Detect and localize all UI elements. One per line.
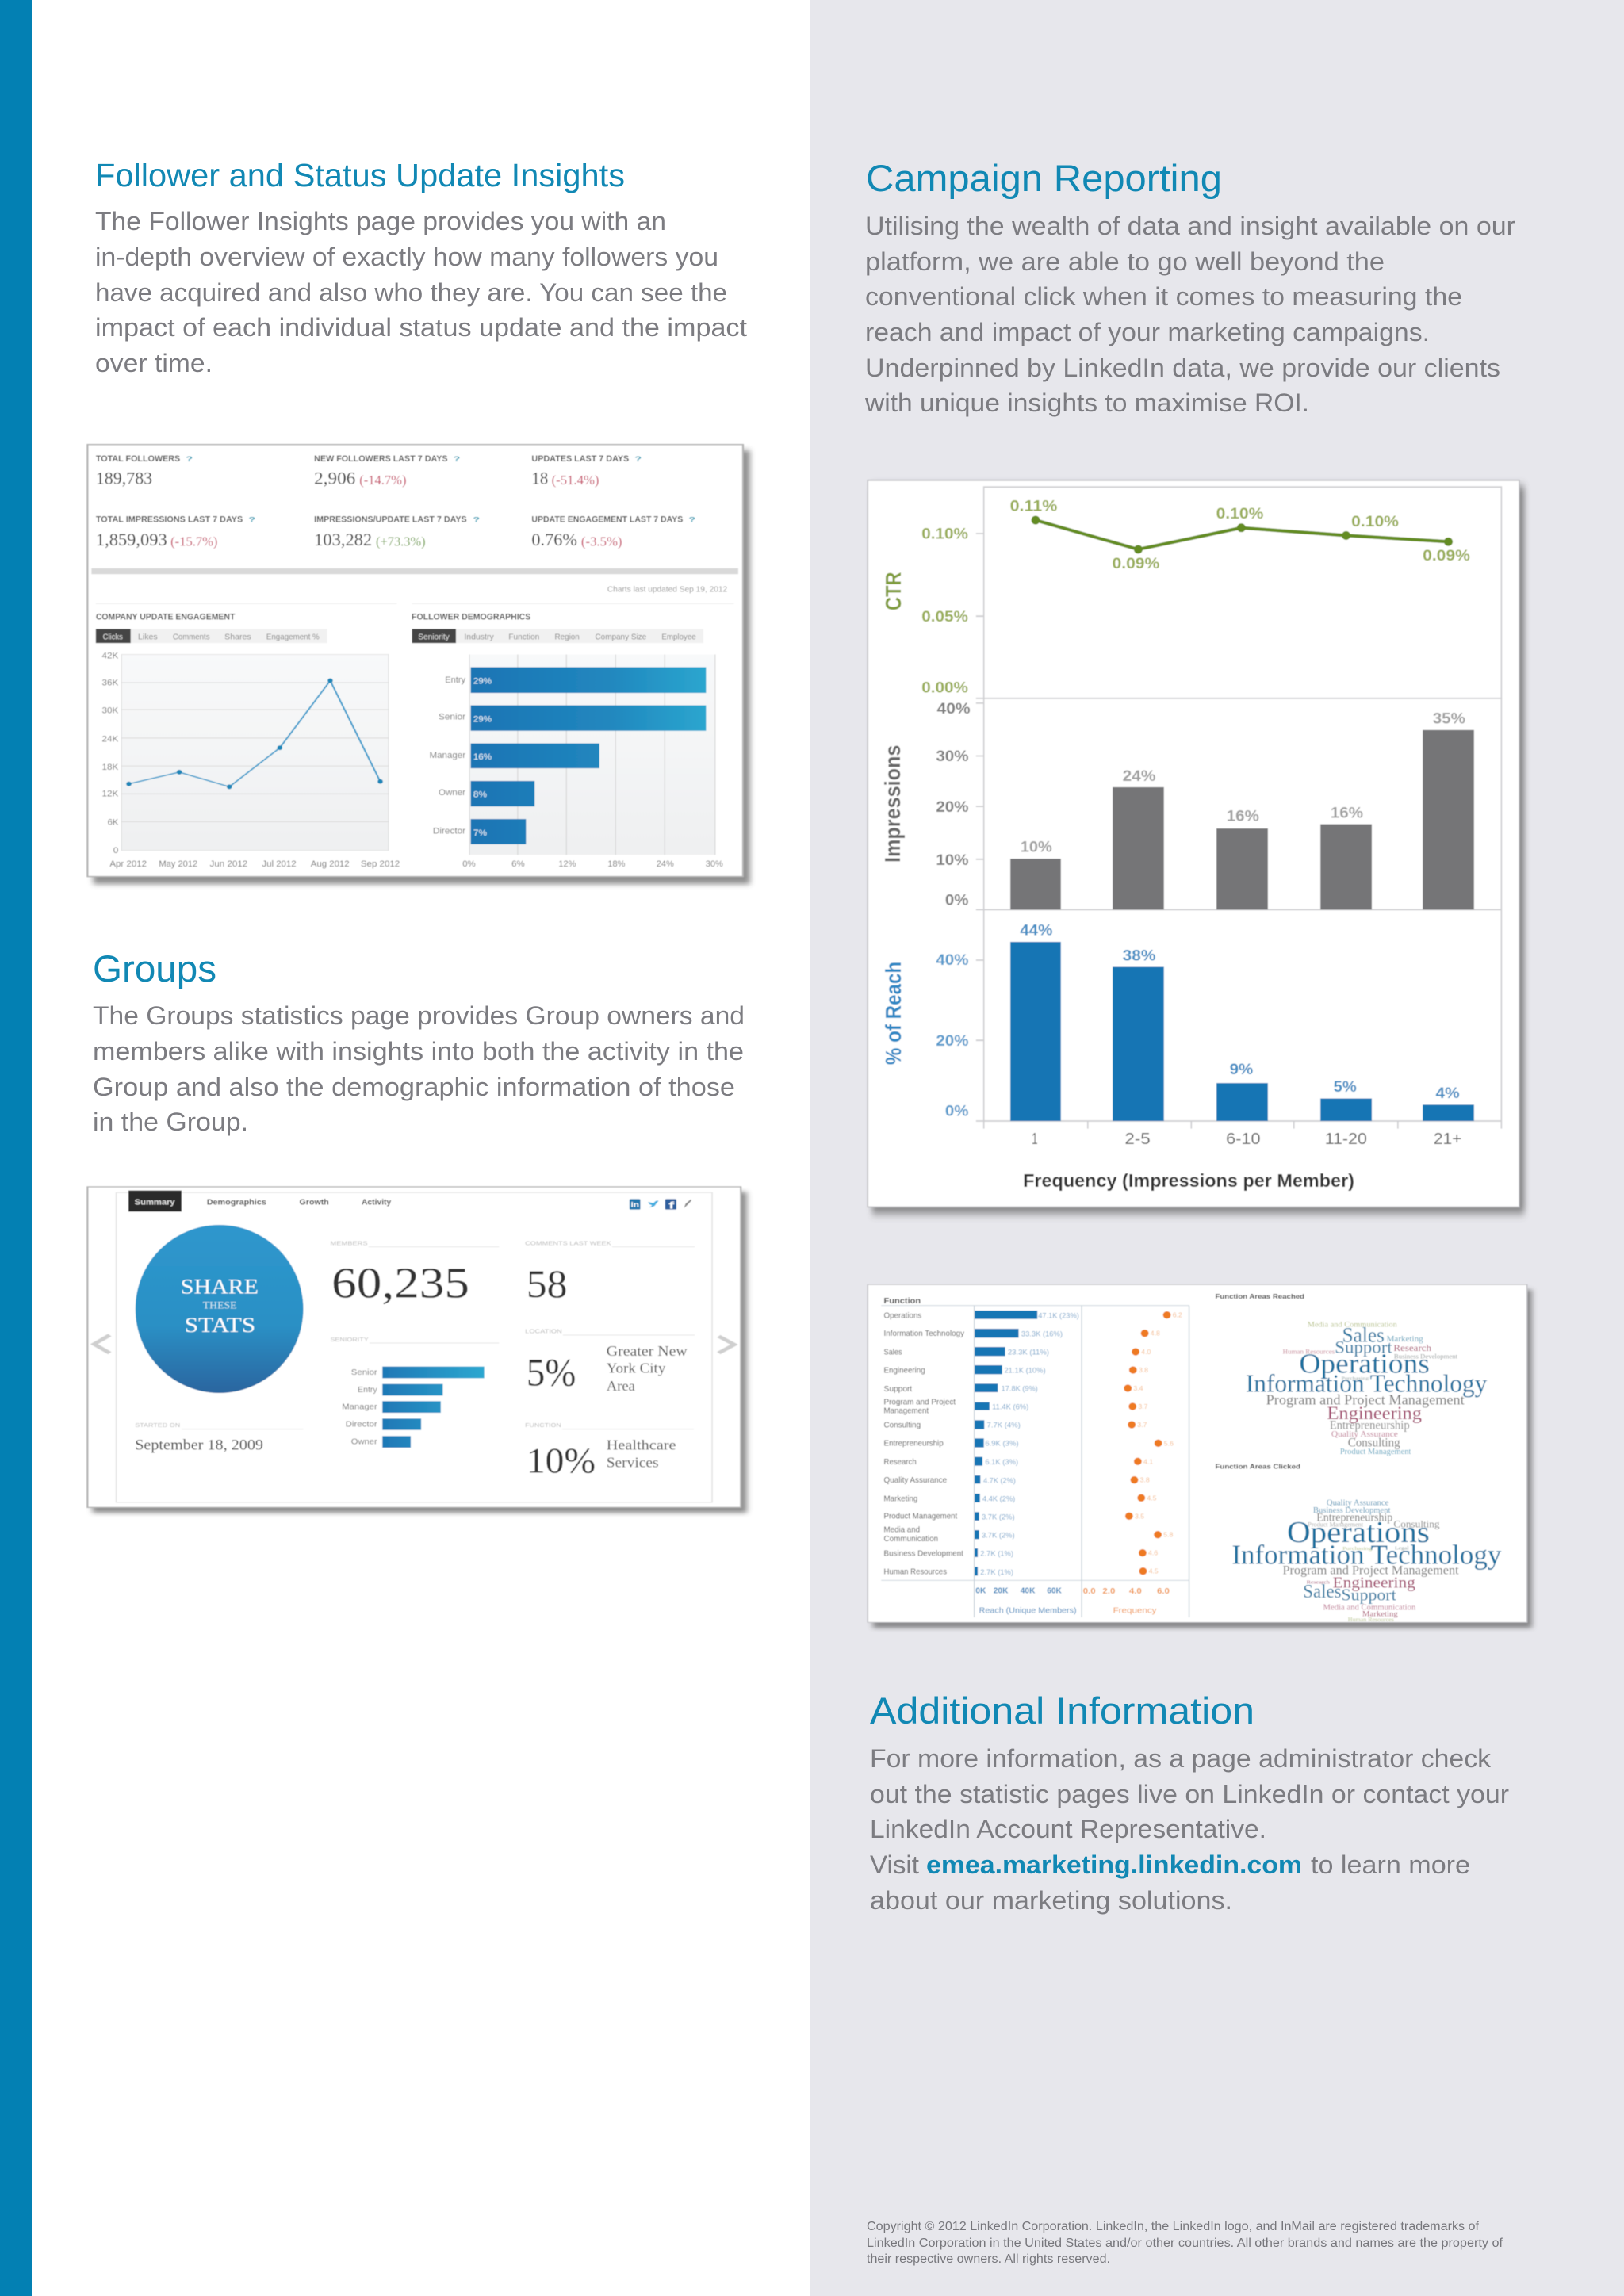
word cloud: function areas reached: Quality Assurance bbox=[1331, 1429, 1398, 1439]
line chart: company update engagement bbox=[102, 650, 400, 868]
page background: grey column bbox=[810, 0, 1624, 2296]
statistic captions: September 18, 2009 bbox=[135, 1437, 263, 1453]
bar chart: percent of reach: 4% bbox=[1436, 1084, 1460, 1101]
word cloud: function areas clicked: Human Resources bbox=[1348, 1617, 1394, 1623]
bar chart: percent of reach: 20% bbox=[936, 1031, 969, 1049]
bar chart: impressions: 20% bbox=[936, 798, 969, 815]
reach axis: 0K bbox=[975, 1586, 986, 1595]
bar chart: impressions: 30% bbox=[936, 747, 969, 764]
stat labels: NEW FOLLOWERS LAST 7 DAYS bbox=[314, 453, 448, 463]
share these stats circle: STATS bbox=[185, 1313, 255, 1337]
section headings: FOLLOWER DEMOGRAPHICS bbox=[412, 611, 530, 622]
small section labels: FUNCTION bbox=[525, 1422, 561, 1429]
statistic captions: York City bbox=[607, 1360, 666, 1376]
bar chart: percent of reach: 44% bbox=[1020, 921, 1052, 939]
bar chart: follower demographics: Owner bbox=[439, 787, 465, 797]
bar chart: reach by function: 2.7K (1%) bbox=[980, 1568, 1013, 1576]
bar chart: impressions: Impressions bbox=[881, 745, 905, 863]
stat labels: IMPRESSIONS/UPDATE LAST 7 DAYS bbox=[314, 514, 467, 524]
dot plot: frequency by function: 5.6 bbox=[1164, 1440, 1174, 1448]
word cloud: function areas reached: Marketing bbox=[1387, 1334, 1423, 1343]
stat labels: UPDATES LAST 7 DAYS bbox=[531, 453, 629, 463]
function row labels: Communication bbox=[884, 1534, 938, 1543]
copyright notice: their respective owners. All rights reserved. bbox=[867, 2252, 1110, 2266]
bar chart: reach by function: 6.1K (3%) bbox=[985, 1458, 1018, 1466]
bar chart: seniority bbox=[342, 1367, 485, 1448]
text block: additional information: out the statistic pages live on LinkedIn or contact your bbox=[870, 1780, 1509, 1808]
line chart: CTR: 0.05% bbox=[921, 607, 968, 625]
text block: follower insights description: impact of each individual status update and the impact bbox=[95, 313, 747, 342]
stat values: 189,783 bbox=[96, 469, 152, 488]
share these stats circle: THESE bbox=[203, 1300, 237, 1311]
bar chart: seniority: Entry bbox=[358, 1385, 377, 1394]
function row labels: Support bbox=[884, 1384, 912, 1393]
blue side stripe bbox=[0, 0, 32, 2296]
panel: campaign frequency chart screenshot bbox=[867, 479, 1529, 1219]
small section labels: COMMENTS LAST WEEK bbox=[525, 1241, 611, 1247]
bar chart: reach by function: 23.3K (11%) bbox=[1008, 1348, 1049, 1357]
word cloud heading: clicked: Function Areas Clicked bbox=[1215, 1463, 1300, 1471]
small section labels bbox=[135, 1241, 611, 1429]
line chart: company update engagement: Jul 2012 bbox=[262, 859, 297, 868]
word cloud: function areas clicked: Program and Project Management bbox=[1282, 1563, 1459, 1577]
text block: follower insights description: in-depth overview of exactly how many followers you bbox=[95, 243, 718, 271]
bar chart: impressions: 40% bbox=[936, 699, 971, 717]
bar chart: follower demographics: 8% bbox=[473, 789, 487, 799]
line chart: CTR: 0.11% bbox=[1010, 497, 1057, 515]
line chart: company update engagement: 6K bbox=[108, 817, 119, 827]
tabs: demographics: Company Size bbox=[595, 632, 646, 641]
word cloud: function areas reached: Research bbox=[1393, 1342, 1431, 1353]
word cloud: function areas reached: Program and Project Management bbox=[1266, 1392, 1465, 1408]
line chart: CTR: 0.00% bbox=[921, 679, 968, 696]
text block: groups description: members alike with insights into both the activity in the bbox=[93, 1037, 744, 1066]
word cloud: function areas reached: Media and Communication bbox=[1308, 1320, 1397, 1329]
word cloud: function areas clicked: Consulting bbox=[1393, 1519, 1440, 1530]
charts updated note: Charts last updated Sep 19, 2012 bbox=[607, 584, 727, 594]
frequency axis: Frequency bbox=[1113, 1606, 1157, 1615]
plot frames bbox=[976, 487, 1501, 1129]
bar chart: follower demographics: Manager bbox=[430, 750, 465, 760]
line chart: CTR: 0.09% bbox=[1112, 554, 1159, 572]
function table header: Function bbox=[884, 1296, 921, 1305]
bar chart: follower demographics: Senior bbox=[439, 711, 465, 721]
dot plot: frequency by function: 4.0 bbox=[1141, 1349, 1151, 1356]
text block: groups description bbox=[93, 1001, 745, 1136]
text block: follower insights description bbox=[95, 207, 747, 377]
function row labels bbox=[884, 1311, 964, 1576]
word cloud: function areas clicked: Product Management bbox=[1308, 1521, 1363, 1529]
tabs: demographics: Region bbox=[554, 632, 580, 641]
stat changes: (-3.5%) bbox=[581, 534, 622, 549]
tabs: demographics: Seniority bbox=[418, 632, 450, 641]
bar chart: follower demographics: Director bbox=[433, 825, 465, 836]
bar chart: reach by function: 21.1K (10%) bbox=[1004, 1366, 1046, 1375]
stat changes: (-14.7%) bbox=[359, 473, 406, 488]
text block: groups description: The Groups statistics page provides Group owners and bbox=[93, 1001, 745, 1030]
bar chart: percent of reach bbox=[882, 921, 1474, 1121]
share these stats circle bbox=[136, 1225, 303, 1393]
tabs: demographics: Industry bbox=[464, 632, 494, 641]
bar chart: impressions: 35% bbox=[1433, 709, 1465, 727]
line chart: CTR bbox=[882, 497, 1470, 696]
stat values bbox=[96, 469, 577, 549]
tabs: demographics bbox=[412, 629, 703, 643]
help icons: ? bbox=[454, 454, 460, 463]
dot plot: frequency by function bbox=[1124, 1311, 1182, 1575]
frequency axis: 6.0 bbox=[1157, 1586, 1170, 1595]
heading: Follower and Status Update Insights: Follower and Status Update Insights bbox=[95, 157, 625, 193]
dot plot: frequency by function: 4.5 bbox=[1147, 1494, 1157, 1502]
word cloud: function areas clicked: Legal bbox=[1395, 1545, 1409, 1551]
bar chart: follower demographics: 30% bbox=[706, 859, 723, 868]
line chart: company update engagement: 0 bbox=[113, 845, 119, 855]
word cloud: function areas reached: Operations bbox=[1299, 1349, 1430, 1380]
bar chart: follower demographics: 6% bbox=[511, 859, 525, 868]
bar chart: percent of reach: 40% bbox=[936, 951, 969, 968]
bar chart: follower demographics: Entry bbox=[445, 675, 465, 684]
text block: additional information: Visit bbox=[870, 1850, 919, 1879]
navigation tabs: Growth bbox=[300, 1198, 329, 1207]
function row labels: Consulting bbox=[884, 1421, 921, 1429]
text block: campaign reporting description: Underpinned by LinkedIn data, we provide our clients bbox=[865, 354, 1500, 382]
function row labels: Business Development bbox=[884, 1549, 963, 1558]
stat labels: TOTAL FOLLOWERS bbox=[96, 453, 180, 463]
text block: additional information: about our marketing solutions. bbox=[870, 1886, 1232, 1915]
text block: groups description: in the Group. bbox=[93, 1108, 248, 1136]
share these stats circle: SHARE bbox=[181, 1275, 259, 1299]
frequency axis labels bbox=[1032, 1130, 1461, 1148]
text block: campaign reporting description: Utilising the wealth of data and insight available on our bbox=[865, 212, 1515, 240]
tabs: engagement bbox=[96, 629, 327, 643]
icon: share buttons bbox=[630, 1199, 691, 1211]
statistic values: 5% bbox=[527, 1350, 576, 1394]
word cloud: function areas clicked: Marketing bbox=[1362, 1610, 1398, 1618]
dot plot: frequency by function: 5.8 bbox=[1163, 1531, 1174, 1539]
bar chart: percent of reach: 9% bbox=[1230, 1060, 1253, 1077]
stat values: 103,282 bbox=[314, 530, 372, 549]
word cloud: function areas reached: Purchasing bbox=[1342, 1376, 1369, 1380]
function row labels: Program and Project bbox=[884, 1398, 956, 1406]
function row labels: Engineering bbox=[884, 1366, 925, 1375]
text block: additional information bbox=[870, 1744, 1509, 1915]
frequency axis labels: 1 bbox=[1032, 1130, 1038, 1148]
bar chart: follower demographics: 24% bbox=[657, 859, 674, 868]
bar chart: follower demographics: 29% bbox=[473, 714, 492, 724]
tabs: engagement: Comments bbox=[173, 632, 210, 641]
line chart: company update engagement: Jun 2012 bbox=[210, 859, 247, 868]
bar chart: reach by function: 11.4K (6%) bbox=[992, 1403, 1028, 1411]
bar chart: percent of reach: 38% bbox=[1123, 947, 1155, 964]
dot plot: frequency by function: 4.6 bbox=[1148, 1549, 1158, 1557]
bar chart: seniority: Senior bbox=[351, 1368, 377, 1376]
dot plot: frequency by function: 3.5 bbox=[1135, 1513, 1144, 1521]
frequency axis: 0.0 bbox=[1083, 1586, 1096, 1595]
bar chart: reach by function: 47.1K (23%) bbox=[1038, 1311, 1079, 1320]
line chart: company update engagement: 12K bbox=[102, 788, 119, 798]
tabs: engagement: Clicks bbox=[103, 632, 123, 641]
reach axis: 20K bbox=[994, 1586, 1009, 1595]
tabs: engagement: Shares bbox=[224, 632, 251, 641]
bar chart: reach by function: 7.7K (4%) bbox=[987, 1422, 1021, 1429]
line chart: CTR: 0.09% bbox=[1423, 546, 1470, 564]
text block: additional information: LinkedIn Account Representative. bbox=[870, 1815, 1266, 1843]
text block: additional information: to learn more bbox=[1311, 1850, 1470, 1879]
stat labels: UPDATE ENGAGEMENT LAST 7 DAYS bbox=[531, 514, 683, 524]
text block: follower insights description: over time. bbox=[95, 349, 213, 377]
word cloud: function areas reached: Business Development bbox=[1394, 1353, 1457, 1360]
line chart: company update engagement: 18K bbox=[102, 762, 119, 771]
word cloud: function areas clicked: Purchasing bbox=[1342, 1546, 1372, 1551]
copyright notice: Copyright © 2012 LinkedIn Corporation. LinkedIn, the LinkedIn logo, and InMail are registered trademarks of bbox=[867, 2220, 1480, 2233]
word cloud: function areas reached: Entrepreneurship bbox=[1330, 1418, 1410, 1432]
bar chart: impressions: 10% bbox=[936, 851, 969, 868]
frequency axis: 2.0 bbox=[1102, 1586, 1116, 1595]
panel: follower insights screenshot bbox=[86, 444, 754, 888]
help icons: ? bbox=[688, 515, 695, 524]
icon: share buttons: f bbox=[668, 1200, 675, 1211]
axis title: frequency: Frequency (Impressions per Member) bbox=[1023, 1170, 1354, 1191]
word cloud: function areas clicked: Support bbox=[1342, 1586, 1396, 1604]
bar chart: reach by function: 3.7K (2%) bbox=[982, 1531, 1015, 1540]
word cloud: function areas reached: Sales bbox=[1342, 1323, 1385, 1346]
function row labels: Product Management bbox=[884, 1512, 957, 1521]
reach axis: 40K bbox=[1021, 1586, 1036, 1595]
bar chart: seniority: Director bbox=[346, 1420, 377, 1429]
bar chart: impressions: 0% bbox=[945, 891, 969, 909]
navigation tabs: Activity bbox=[362, 1198, 392, 1207]
function row labels: Entrepreneurship bbox=[884, 1439, 944, 1448]
line chart: CTR: CTR bbox=[882, 572, 906, 610]
dot plot: frequency by function: 4.8 bbox=[1151, 1330, 1160, 1337]
panel: group statistics screenshot bbox=[86, 1186, 751, 1516]
bar chart: reach by function: 4.4K (2%) bbox=[982, 1494, 1015, 1503]
stat labels: TOTAL IMPRESSIONS LAST 7 DAYS bbox=[96, 514, 243, 524]
dot plot: frequency by function: 6.2 bbox=[1173, 1311, 1182, 1319]
frequency axis: 4.0 bbox=[1129, 1586, 1142, 1595]
stat changes: (+73.3%) bbox=[376, 534, 426, 549]
line chart: company update engagement: 24K bbox=[102, 733, 119, 744]
bar chart: impressions: 16% bbox=[1331, 804, 1363, 821]
help icons: ? bbox=[186, 454, 193, 463]
bar chart: reach by function: 33.3K (16%) bbox=[1021, 1330, 1063, 1338]
word cloud: function areas reached: Engineering bbox=[1327, 1402, 1422, 1423]
line chart: company update engagement: 30K bbox=[102, 705, 119, 715]
frequency axis labels: 6-10 bbox=[1226, 1130, 1261, 1148]
statistic values: 10% bbox=[527, 1441, 596, 1481]
stat values: 2,906 bbox=[314, 469, 355, 488]
word cloud: function areas clicked: Research bbox=[1307, 1579, 1330, 1585]
word cloud: function areas clicked bbox=[1231, 1498, 1502, 1623]
icon: share buttons: in bbox=[630, 1201, 639, 1209]
panel: function reach and word clouds screenshot bbox=[867, 1284, 1536, 1632]
statistic captions: Healthcare bbox=[607, 1437, 676, 1453]
function row labels: Information Technology bbox=[884, 1329, 964, 1337]
bar chart: follower demographics: 7% bbox=[473, 828, 487, 837]
bar chart: follower demographics: 29% bbox=[473, 675, 492, 686]
word cloud: function areas reached: Human Resources bbox=[1282, 1347, 1335, 1356]
stat changes: (-15.7%) bbox=[170, 534, 217, 549]
help icons bbox=[186, 454, 695, 524]
help icons: ? bbox=[248, 515, 255, 524]
dot plot: frequency by function: 4.1 bbox=[1143, 1458, 1153, 1466]
function row labels: Marketing bbox=[884, 1494, 917, 1503]
word cloud: function areas reached: Support bbox=[1335, 1338, 1392, 1357]
bar chart: reach by function: 3.7K (2%) bbox=[982, 1513, 1015, 1521]
bar chart: reach by function: 6.9K (3%) bbox=[985, 1440, 1019, 1448]
stat labels bbox=[96, 453, 683, 524]
line chart: company update engagement: 36K bbox=[102, 677, 119, 687]
statistic captions bbox=[135, 1344, 688, 1471]
bar chart: impressions: 10% bbox=[1021, 838, 1052, 855]
line chart: CTR: 0.10% bbox=[1351, 512, 1399, 530]
stat values: 18 bbox=[531, 469, 548, 488]
small section labels: SENIORITY bbox=[330, 1337, 369, 1343]
stat values: 0.76% bbox=[531, 530, 577, 549]
line chart: company update engagement: Aug 2012 bbox=[311, 859, 350, 868]
bar chart: seniority: Owner bbox=[351, 1437, 377, 1446]
line chart: CTR: 0.10% bbox=[1216, 504, 1263, 522]
word cloud: function areas clicked: Sales bbox=[1303, 1581, 1342, 1602]
dot plot: frequency by function: 3.7 bbox=[1137, 1422, 1147, 1429]
heading: Additional Information: Additional Information bbox=[870, 1689, 1254, 1732]
small section labels: MEMBERS bbox=[330, 1241, 368, 1247]
function row labels: Media and bbox=[884, 1525, 920, 1534]
reach axis: 60K bbox=[1047, 1586, 1062, 1595]
page background: white column bbox=[0, 0, 810, 2296]
text block: additional information: emea.marketing.linkedin.com bbox=[926, 1850, 1302, 1879]
word cloud: function areas clicked: Entrepreneurship bbox=[1316, 1511, 1392, 1524]
copyright notice bbox=[867, 2220, 1503, 2266]
navigation tabs bbox=[128, 1191, 392, 1211]
bar chart: reach by function: 17.8K (9%) bbox=[1002, 1385, 1038, 1393]
function row labels: Research bbox=[884, 1457, 917, 1466]
frequency axis labels: 11-20 bbox=[1325, 1130, 1367, 1148]
navigation tabs: Demographics bbox=[207, 1198, 266, 1207]
dot plot: frequency by function: 3.4 bbox=[1133, 1385, 1143, 1392]
statistic captions: Services bbox=[607, 1455, 659, 1471]
text block: follower insights description: have acquired and also who they are. You can see the bbox=[95, 278, 727, 307]
function row labels: Quality Assurance bbox=[884, 1475, 947, 1484]
reach axis bbox=[975, 1586, 1077, 1615]
text block: campaign reporting description: reach and impact of your marketing campaigns. bbox=[865, 318, 1430, 346]
bar chart: impressions: 16% bbox=[1227, 806, 1259, 825]
frequency axis labels: 21+ bbox=[1434, 1130, 1461, 1148]
copyright notice: LinkedIn Corporation in the United States and/or other countries. All other brands and names are the property of bbox=[867, 2237, 1503, 2250]
stat values: 1,859,093 bbox=[96, 530, 167, 549]
bar chart: follower demographics: 18% bbox=[607, 859, 625, 868]
statistic captions: Area bbox=[607, 1379, 635, 1394]
dot plot: frequency by function: 3.7 bbox=[1138, 1403, 1147, 1410]
heading: Campaign Reporting: Campaign Reporting bbox=[866, 157, 1222, 199]
text block: campaign reporting description: with unique insights to maximise ROI. bbox=[864, 388, 1309, 417]
text block: groups description: Group and also the demographic information of those bbox=[93, 1073, 735, 1101]
bar chart: reach by function bbox=[975, 1311, 1079, 1576]
frequency axis bbox=[1083, 1586, 1170, 1615]
word cloud: function areas clicked: Business Development bbox=[1313, 1506, 1391, 1514]
text block: campaign reporting description: conventional click when it comes to measuring the bbox=[865, 282, 1462, 311]
bar chart: percent of reach: 5% bbox=[1334, 1077, 1357, 1095]
text block: campaign reporting description bbox=[864, 212, 1515, 417]
line chart: company update engagement: Apr 2012 bbox=[109, 859, 147, 868]
bar chart: impressions bbox=[881, 699, 1474, 909]
navigation tabs: Summary bbox=[135, 1198, 175, 1207]
arrows: previous and next bbox=[94, 1335, 734, 1353]
word cloud: function areas clicked: Quality Assurance bbox=[1327, 1498, 1388, 1508]
reach axis: Reach (Unique Members) bbox=[979, 1606, 1077, 1615]
stat changes: (-51.4%) bbox=[552, 473, 599, 488]
tabs: engagement: Likes bbox=[138, 632, 158, 641]
function row labels: Management bbox=[884, 1406, 929, 1415]
bar chart: reach by function: 4.7K (2%) bbox=[983, 1476, 1016, 1485]
dot plot: frequency by function: 3.8 bbox=[1140, 1476, 1150, 1484]
section headings bbox=[96, 611, 530, 622]
word cloud: function areas reached: Product Management bbox=[1340, 1447, 1411, 1456]
statistic values: 58 bbox=[527, 1261, 567, 1306]
statistic values bbox=[331, 1259, 596, 1481]
bar chart: percent of reach: % of Reach bbox=[882, 962, 906, 1065]
small section labels: STARTED ON bbox=[135, 1422, 180, 1429]
line chart: CTR: 0.10% bbox=[921, 525, 968, 542]
bar chart: reach by function: 2.7K (1%) bbox=[980, 1549, 1013, 1558]
word cloud: function areas reached bbox=[1246, 1320, 1488, 1456]
text block: follower insights description: The Follower Insights page provides you with an bbox=[95, 207, 666, 235]
statistic values: 60,235 bbox=[331, 1259, 469, 1307]
word cloud: function areas clicked: Media and Communication bbox=[1323, 1603, 1415, 1612]
text block: additional information: For more information, as a page administrator check bbox=[870, 1744, 1492, 1773]
bar chart: follower demographics bbox=[430, 655, 723, 868]
bar chart: follower demographics: 0% bbox=[462, 859, 476, 868]
help icons: ? bbox=[473, 515, 480, 524]
bar chart: percent of reach: 0% bbox=[945, 1101, 969, 1119]
word cloud: function areas clicked: Engineering bbox=[1333, 1574, 1415, 1591]
frequency axis labels: 2-5 bbox=[1124, 1130, 1151, 1148]
word cloud: function areas clicked: Operations bbox=[1287, 1516, 1430, 1549]
word cloud: function areas reached: Consulting bbox=[1348, 1436, 1400, 1449]
line chart: company update engagement: 42K bbox=[102, 650, 119, 660]
bar chart: follower demographics: 12% bbox=[558, 859, 576, 868]
stat changes bbox=[170, 473, 622, 549]
line chart: company update engagement: May 2012 bbox=[159, 859, 197, 868]
line chart: company update engagement: Sep 2012 bbox=[361, 859, 400, 868]
function row labels: Sales bbox=[884, 1348, 902, 1357]
function row labels: Human Resources bbox=[884, 1567, 947, 1576]
dot plot: frequency by function: 4.5 bbox=[1149, 1567, 1159, 1575]
bar chart: impressions: 24% bbox=[1123, 767, 1155, 784]
heading: Groups: Groups bbox=[93, 947, 216, 989]
small section labels: LOCATION bbox=[525, 1329, 562, 1335]
function row labels: Operations bbox=[884, 1311, 921, 1320]
tabs: demographics: Function bbox=[508, 632, 539, 641]
help icons: ? bbox=[634, 454, 642, 463]
dot plot: frequency by function: 3.8 bbox=[1139, 1367, 1148, 1374]
text block: campaign reporting description: platform, we are able to go well beyond the bbox=[865, 247, 1385, 276]
tabs: demographics: Employee bbox=[661, 632, 696, 641]
bar chart: follower demographics: 16% bbox=[473, 752, 492, 761]
word cloud heading: reached: Function Areas Reached bbox=[1215, 1293, 1304, 1300]
section headings: COMPANY UPDATE ENGAGEMENT bbox=[96, 611, 236, 622]
bar chart: seniority: Manager bbox=[342, 1402, 377, 1411]
tabs: engagement: Engagement % bbox=[266, 632, 320, 641]
statistic captions: Greater New bbox=[607, 1344, 688, 1359]
